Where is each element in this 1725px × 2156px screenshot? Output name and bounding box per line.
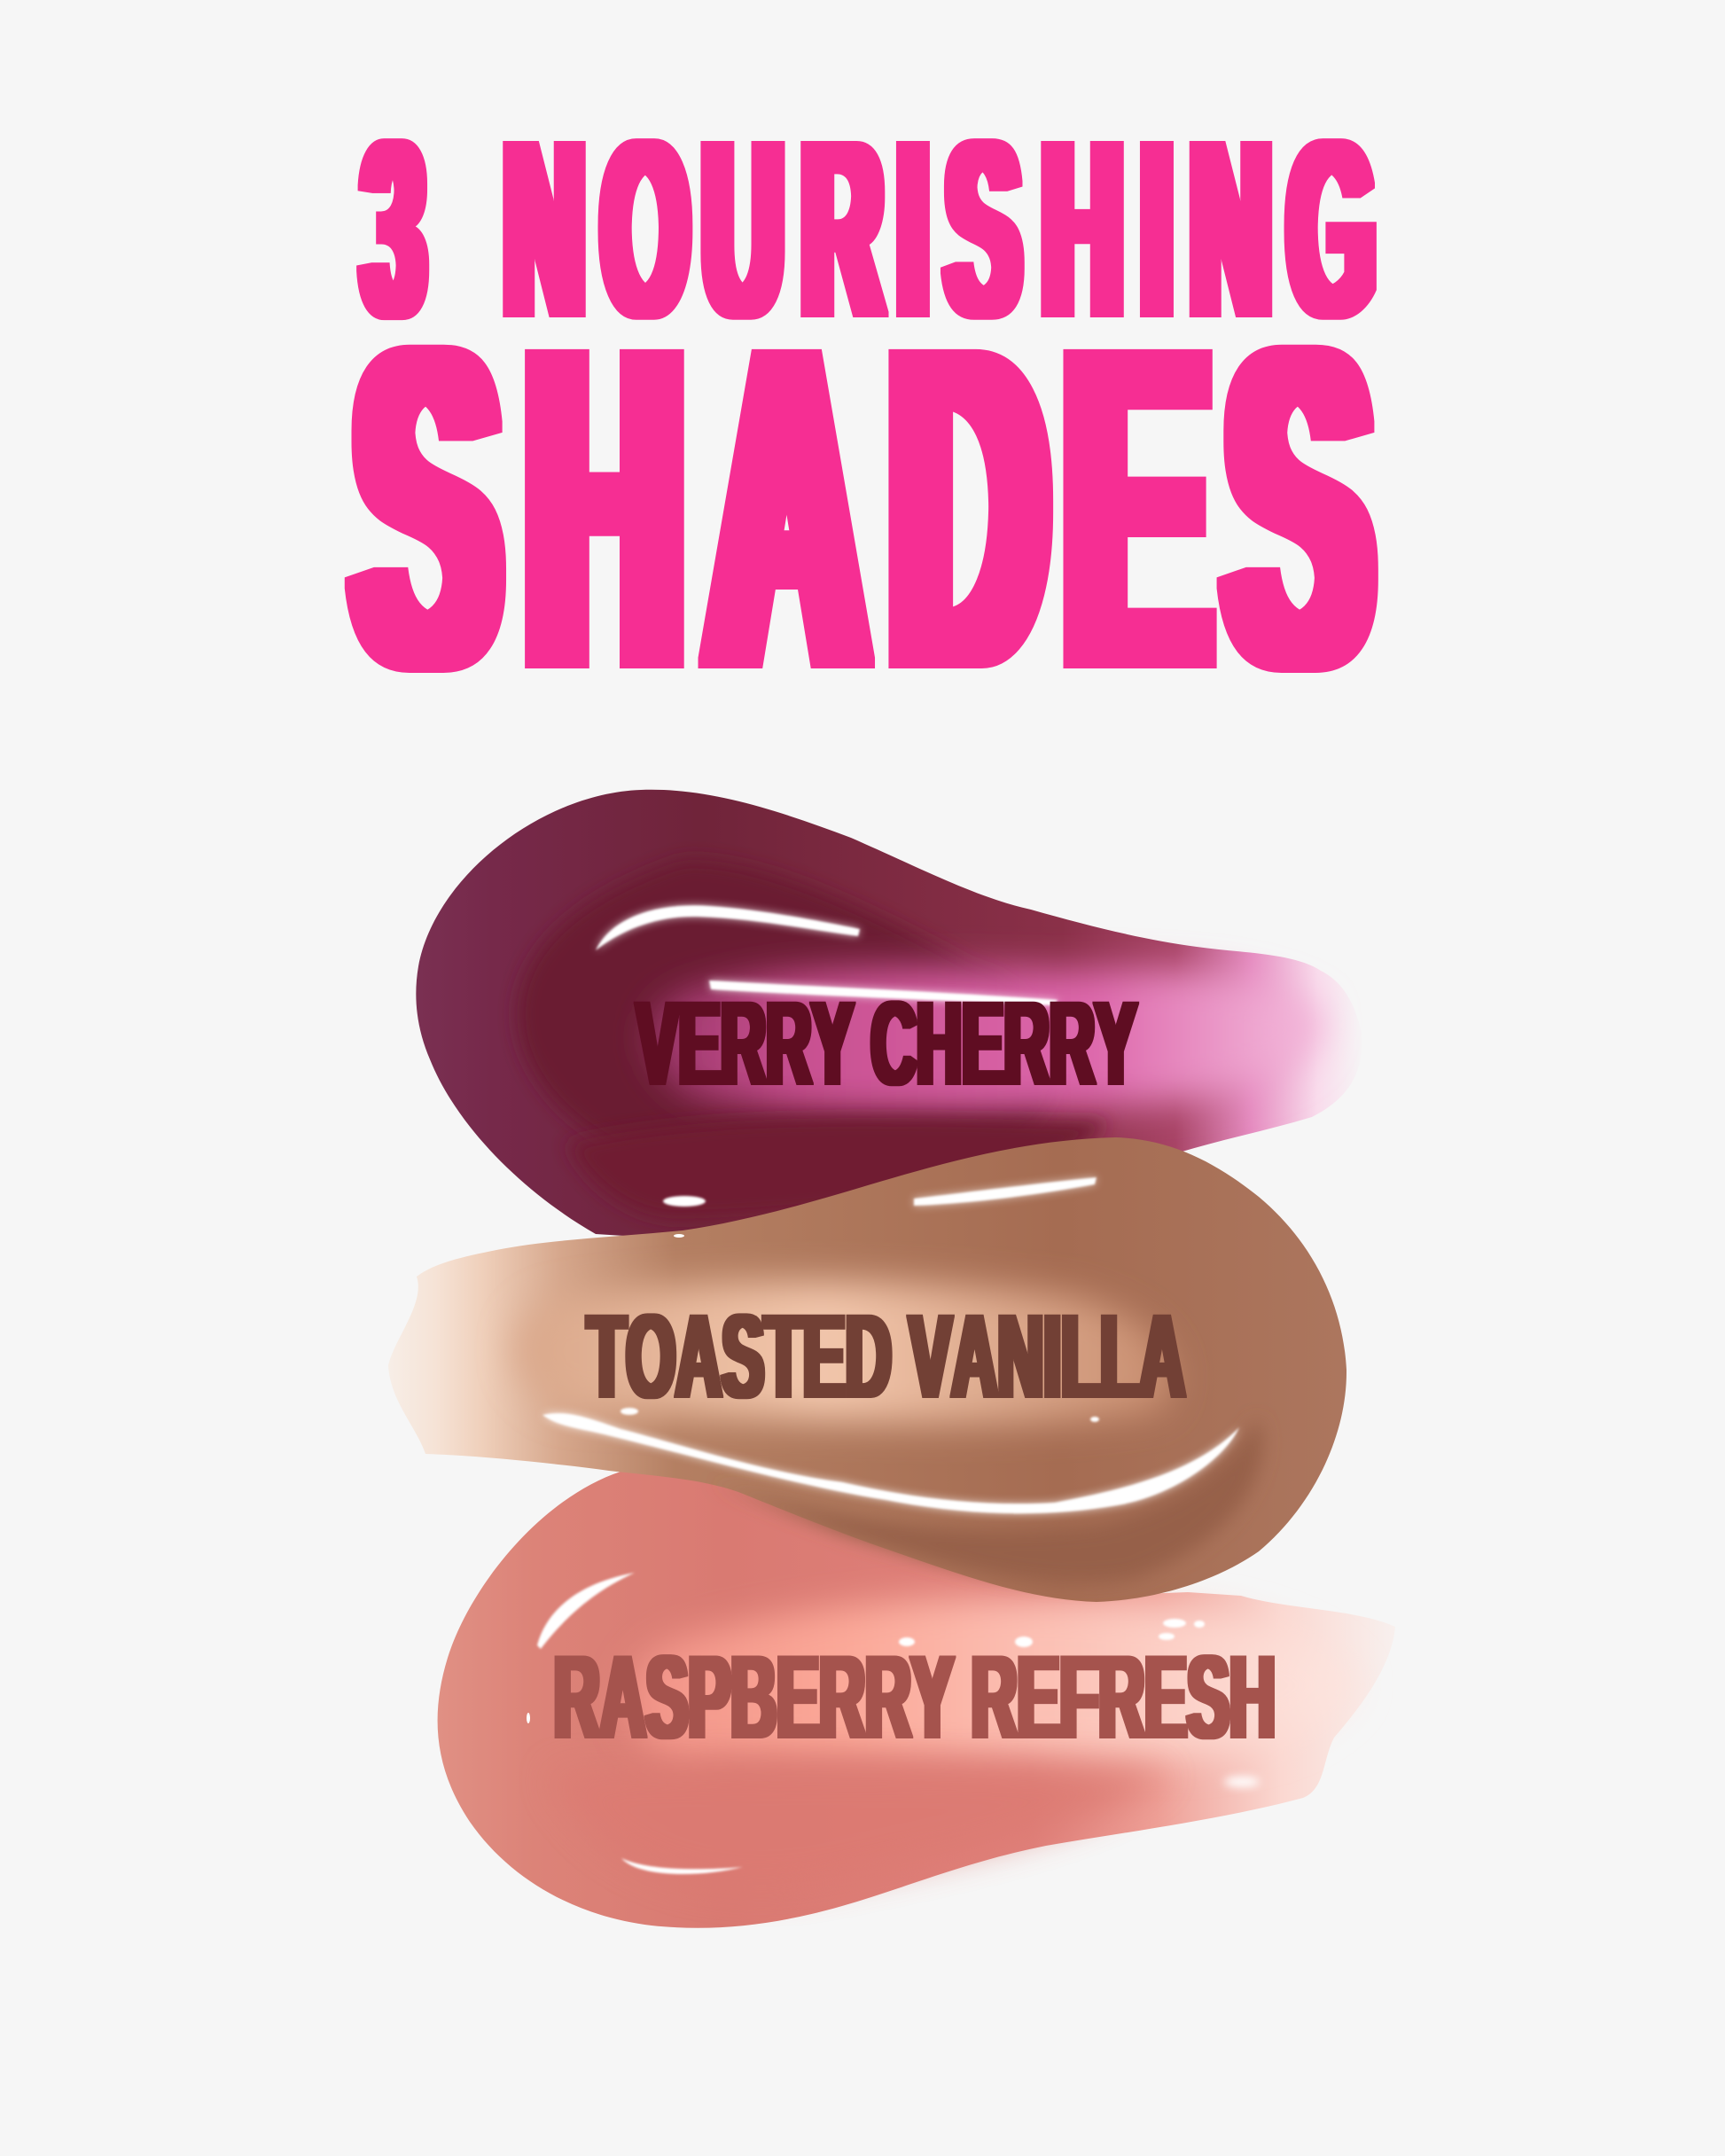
swatch: raspberry refresh — [438, 1472, 1395, 1928]
glow band — [628, 1597, 1356, 1760]
label: toasted vanilla: TOASTED VANILLA — [587, 1291, 1185, 1423]
highlights — [542, 1177, 1239, 1513]
highlights — [527, 1573, 1260, 1874]
lower shade — [550, 1766, 1170, 1889]
lower dark shade — [567, 1118, 1108, 1219]
label: raspberry refresh: RASPBERRY REFRESH — [554, 1632, 1276, 1763]
label: verry cherry: VERRY CHERRY — [636, 978, 1136, 1110]
pink core — [649, 967, 1322, 1113]
title — [355, 90, 1375, 759]
title line 2: SHADES — [355, 258, 1370, 759]
light core — [515, 1282, 1174, 1424]
lower dark band — [709, 1418, 1262, 1582]
swatch: verry cherry — [416, 790, 1362, 1241]
highlights — [596, 905, 1058, 1207]
title line 1: 3 NOURISHING — [363, 90, 1375, 368]
swatch: toasted vanilla — [388, 1137, 1346, 1602]
inner dark ring — [517, 860, 1059, 1177]
